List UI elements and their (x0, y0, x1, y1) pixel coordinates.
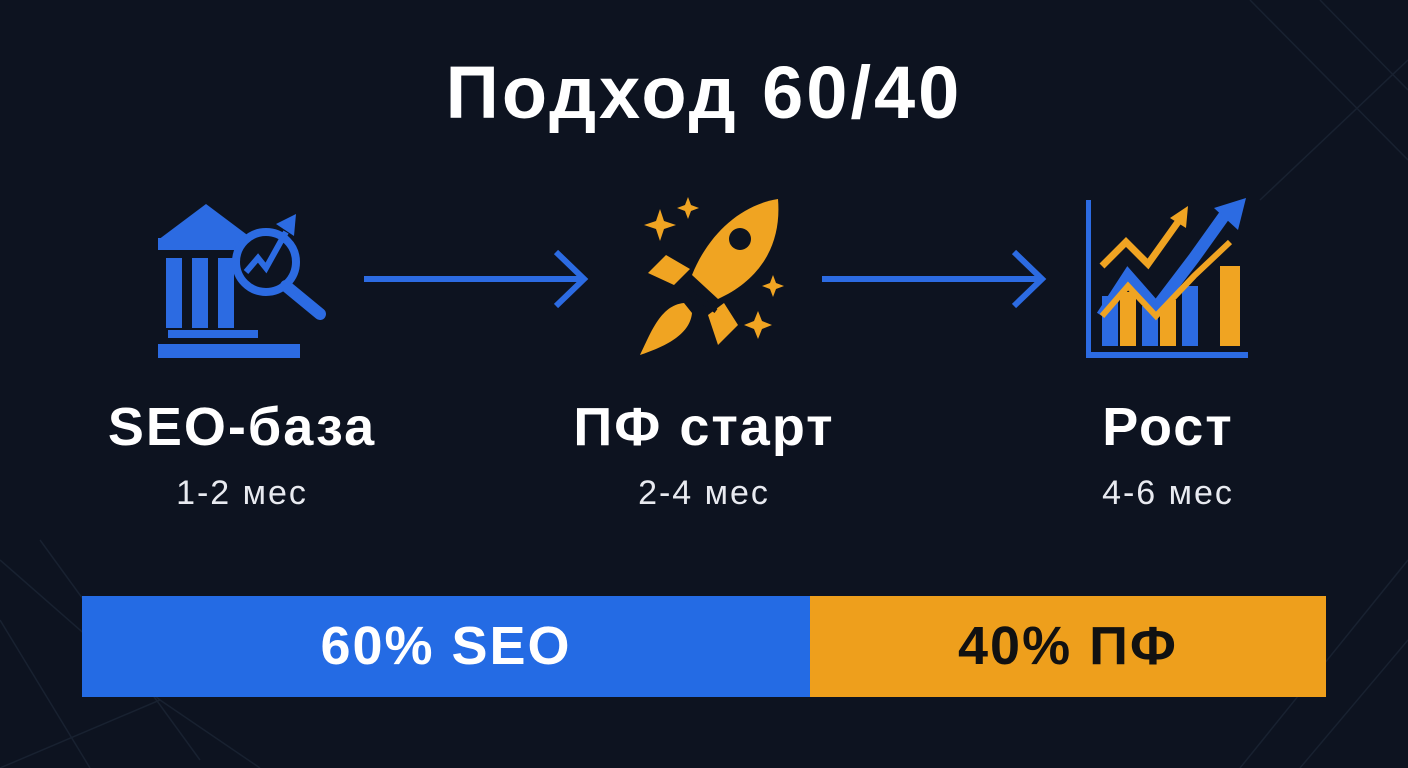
segment: 60% SEO (82, 596, 810, 697)
title: Подход 60/40 (446, 51, 962, 134)
sub: 2-4 мес: 2-4 мес (638, 474, 770, 512)
bar: 60/40 split (82, 596, 1326, 697)
icon: bank with magnifier (158, 204, 326, 358)
arrow 1 (364, 250, 588, 308)
segment: 40% ПФ (810, 596, 1326, 697)
icon: rocket (640, 197, 784, 355)
segment: 40% ПФ: 40% ПФ (958, 616, 1178, 676)
icon: growth chart (1086, 198, 1248, 358)
label: ПФ старт: ПФ старт (573, 397, 835, 457)
segment: 60% SEO: 60% SEO (320, 616, 572, 676)
sub: 1-2 мес: 1-2 мес (176, 474, 308, 512)
label: Рост: Рост (1102, 397, 1234, 457)
arrow 2 (822, 250, 1046, 308)
sub: 4-6 мес: 4-6 мес (1102, 474, 1234, 512)
label: SEO-база: SEO-база (108, 397, 376, 457)
